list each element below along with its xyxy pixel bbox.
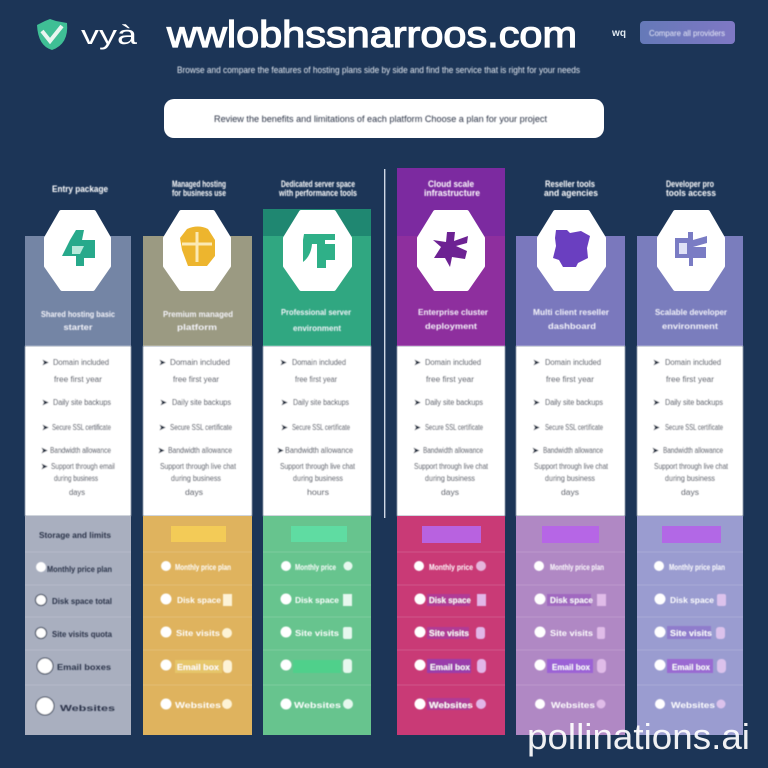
column 3 features list: hours — [307, 488, 329, 497]
column 5 heading: and agencies — [544, 188, 598, 198]
column 5 heading — [544, 179, 598, 198]
column 4 comparison rows: Websites — [429, 701, 474, 710]
column 1 hexagon icon — [46, 212, 109, 289]
column 2 features list: Domain included — [170, 358, 230, 367]
column 6 features list: Support through live chat — [654, 462, 729, 471]
column 5 features list: Domain included — [545, 358, 601, 367]
column 5 heading: Reseller tools — [545, 179, 595, 189]
column 4 plan name: Enterprise cluster — [418, 307, 489, 317]
column 5 header band — [516, 236, 625, 346]
column 5 features list: Daily site backups — [545, 398, 603, 407]
column 1 plan name: starter — [64, 322, 93, 332]
column 2 plan name — [163, 309, 233, 332]
column 6 features list: ➤ — [652, 446, 659, 455]
column 1 comparison rows: Storage and limits — [39, 531, 112, 540]
column 5 features list: Bandwidth allowance — [543, 446, 603, 455]
panel: column 5 — [516, 179, 625, 735]
panel: column 6 — [637, 179, 743, 735]
column 4 features list: free first year — [426, 375, 474, 384]
column 2 features list: days — [185, 488, 203, 497]
column 2 features list: Daily site backups — [172, 398, 231, 407]
column 3 features list: ➤ — [281, 398, 288, 407]
column 5 comparison rows: Email box — [552, 663, 591, 672]
column 1 features list: ➤ — [42, 398, 49, 407]
column 3 features list: Support through live chat — [280, 462, 356, 471]
logo: shield and wordmark — [37, 19, 138, 50]
column 5 features list: free first year — [546, 375, 594, 384]
column 3 features list — [263, 346, 371, 516]
column 2 heading — [172, 179, 226, 198]
column 5 comparison rows: Monthly price plan — [550, 563, 604, 572]
column 2 features list: Bandwidth allowance — [168, 446, 232, 455]
column 4 comparison rows: Site visits — [429, 629, 470, 638]
column 6 features list: ➤ — [653, 358, 660, 367]
column 4 heading: infrastructure — [424, 188, 480, 198]
column 4 features list: Secure SSL certificate — [425, 423, 483, 432]
column 6 features list — [637, 346, 743, 516]
column 1 features list: days — [69, 488, 85, 497]
column 5 features list: ➤ — [533, 423, 540, 432]
column 5 features list: ➤ — [533, 358, 540, 367]
column 1 features list: free first year — [54, 375, 102, 384]
column 6 heading: tools access — [666, 188, 716, 198]
column 1 features list — [25, 346, 131, 516]
column 4 header band — [397, 168, 505, 236]
column 3 comparison rows: Websites — [294, 701, 342, 710]
column 6 comparison rows: Email box — [672, 663, 711, 672]
column 4 features list: Bandwidth allowance — [423, 446, 483, 455]
column 2 plan name: platform — [177, 322, 218, 332]
column 3 features list: Bandwidth allowance — [285, 446, 353, 455]
central divider — [384, 169, 385, 518]
column 2 comparison rows — [143, 516, 252, 735]
column 4 features list: during business — [425, 474, 475, 483]
column 5 comparison rows: Site visits — [550, 629, 594, 638]
column 5 features list: ➤ — [533, 398, 540, 407]
column 1 features list: during business — [54, 474, 98, 483]
column 3 features list: Domain included — [292, 358, 346, 367]
panel: column 3 — [263, 179, 371, 735]
column 4 comparison rows: Email box — [430, 663, 471, 672]
column 1 features list: Bandwidth allowance — [50, 446, 111, 455]
panel: column 4 (highlighted) — [397, 168, 505, 735]
panel: column 1 — [25, 184, 131, 735]
column 6 features list: Bandwidth allowance — [663, 446, 723, 455]
column 3 features list: Daily site backups — [293, 398, 349, 407]
column 2 heading: for business use — [172, 188, 226, 198]
column 6 features list: days — [681, 488, 699, 497]
column 5 features list: during business — [545, 474, 595, 483]
panel: column 2 — [143, 179, 252, 735]
column 1 comparison rows: Disk space total — [52, 597, 112, 606]
column 6 features list: ➤ — [653, 398, 660, 407]
column 3 header band — [263, 209, 371, 236]
column 3 comparison rows: Site visits — [295, 629, 340, 638]
logo: shield and wordmark: vyà — [81, 20, 138, 50]
column 6 features list: Daily site backups — [665, 398, 723, 407]
column 2 comparison rows: Site visits — [176, 629, 221, 638]
column 2 features list: ➤ — [158, 446, 165, 455]
column 1 comparison rows: Monthly price plan — [47, 565, 112, 574]
column 2 comparison rows: Monthly price plan — [175, 563, 231, 572]
watermark: pollinations.ai — [527, 716, 750, 757]
column 6 features list: during business — [665, 474, 715, 483]
subtitle: Browse and compare the features of hosting plans side by side and find the service that is right for your needs — [177, 65, 580, 76]
column 1 comparison rows: Site visits quota — [52, 630, 113, 639]
column 2 features list: Support through live chat — [160, 462, 237, 471]
column 2 features list: ➤ — [159, 423, 166, 432]
column 3 features list: during business — [293, 474, 343, 483]
column 2 comparison rows: Disk space — [177, 596, 222, 605]
column 1 comparison rows: Websites — [60, 704, 116, 713]
column 4 comparison rows: Monthly price — [429, 563, 473, 572]
column 4 features list: Domain included — [425, 358, 481, 367]
header button — [640, 21, 735, 44]
title: wwlobhssnarroos.com — [166, 14, 577, 55]
column 3 features list: free first year — [295, 375, 337, 384]
column 3 plan name — [281, 307, 352, 333]
column 3 comparison rows: Monthly price — [295, 563, 336, 572]
column 4 heading — [424, 179, 480, 198]
column 3 heading: Dedicated server space — [281, 179, 355, 189]
column 1 header band — [25, 236, 131, 346]
column 6 features list: Secure SSL certificate — [665, 423, 723, 432]
column 5 comparison rows: Disk space — [550, 596, 594, 605]
column 6 comparison rows: Disk space — [670, 596, 715, 605]
language label: wq — [611, 28, 626, 39]
column 4 comparison rows: Disk space — [429, 596, 472, 605]
column 2 hexagon icon — [165, 212, 229, 289]
column 4 features list: Daily site backups — [425, 398, 483, 407]
column 3 comparison rows: Disk space — [295, 596, 340, 605]
column 4 hexagon icon — [419, 212, 483, 289]
column 3 heading — [278, 179, 357, 198]
column 4 features list: ➤ — [414, 358, 421, 367]
column 6 features list: Domain included — [665, 358, 721, 367]
column 4 plan name — [418, 307, 489, 331]
column 6 comparison rows: Site visits — [670, 629, 713, 638]
column 3 features list: ➤ — [277, 446, 284, 455]
column 3 comparison rows — [263, 516, 371, 735]
column 4 plan name: deployment — [425, 321, 477, 331]
column 4 features list: ➤ — [414, 423, 421, 432]
column 1 plan name — [41, 309, 115, 332]
column 5 features list: Secure SSL certificate — [545, 423, 603, 432]
column 2 plan name: Premium managed — [163, 309, 233, 319]
column 4 features list: ➤ — [413, 446, 420, 455]
column 4 features list: days — [441, 488, 459, 497]
column 5 hexagon icon — [539, 212, 604, 289]
column 3 hexagon icon — [285, 212, 350, 289]
column 1 features list: Support through email — [51, 462, 115, 471]
column 2 features list: ➤ — [159, 358, 166, 367]
column 5 plan name: dashboard — [548, 321, 596, 331]
column 6 plan name: Scalable developer — [655, 307, 728, 317]
column 5 plan name: Multi client reseller — [533, 307, 610, 317]
column 5 comparison rows: Websites — [551, 701, 596, 710]
column 6 comparison rows — [637, 516, 743, 735]
column 6 plan name — [655, 307, 728, 331]
column 2 features list: free first year — [173, 375, 219, 384]
column 2 features list — [143, 346, 252, 516]
column 3 plan name: environment — [293, 323, 341, 333]
column 1 features list: Daily site backups — [53, 398, 111, 407]
column 5 comparison rows — [516, 516, 625, 735]
column 6 hexagon icon — [659, 212, 723, 289]
column 4 heading: Cloud scale — [428, 179, 474, 189]
column 5 features list: ➤ — [532, 446, 539, 455]
column 1 features list: ➤ — [42, 358, 49, 367]
column 3 features list: ➤ — [281, 423, 288, 432]
column 5 features list: days — [561, 488, 579, 497]
column 4 features list: Support through live chat — [414, 462, 489, 471]
column 4 features list: ➤ — [414, 398, 421, 407]
column 2 comparison rows: Email box — [177, 663, 220, 672]
column 2 features list: Secure SSL certificate — [170, 423, 232, 432]
column 6 header band — [637, 236, 743, 346]
column 5 plan name — [533, 307, 610, 331]
column 3 features list: Secure SSL certificate — [292, 423, 350, 432]
column 3 heading: with performance tools — [278, 188, 357, 198]
column 2 comparison rows: Websites — [175, 701, 222, 710]
column 3 features list: ➤ — [280, 358, 287, 367]
column 1 plan name: Shared hosting basic — [41, 309, 115, 319]
column 1 features list: Domain included — [53, 358, 109, 367]
header button: Compare all providers — [649, 28, 725, 38]
column 1 heading: Entry package — [52, 184, 108, 194]
search callout box — [164, 99, 604, 138]
column 6 features list: ➤ — [653, 423, 660, 432]
column 1 comparison rows — [25, 516, 131, 735]
column 6 heading — [666, 179, 716, 198]
column 3 plan name: Professional server — [281, 307, 352, 317]
column 1 features list: ➤ — [41, 462, 48, 471]
column 1 features list: ➤ — [41, 446, 48, 455]
column 1 features list: ➤ — [42, 423, 49, 432]
column 6 comparison rows: Monthly price plan — [669, 563, 725, 572]
search callout box: Review the benefits and limitations of each platform Choose a plan for your project — [214, 114, 547, 124]
column 2 heading: Managed hosting — [172, 179, 226, 189]
column 4 features list — [397, 346, 505, 516]
column 5 features list: Support through live chat — [534, 462, 609, 471]
column 5 features list — [516, 346, 625, 516]
column 1 features list: Secure SSL certificate — [52, 423, 111, 432]
column 2 features list: during business — [171, 474, 221, 483]
column 6 features list: free first year — [666, 375, 714, 384]
column 1 comparison rows: Email boxes — [57, 663, 112, 672]
column 6 plan name: environment — [662, 321, 718, 331]
column 4 comparison rows — [397, 516, 505, 735]
column 6 comparison rows: Websites — [671, 701, 716, 710]
column 6 heading: Developer pro — [666, 179, 714, 189]
column 2 features list: ➤ — [160, 398, 167, 407]
column 2 header band — [143, 236, 252, 346]
